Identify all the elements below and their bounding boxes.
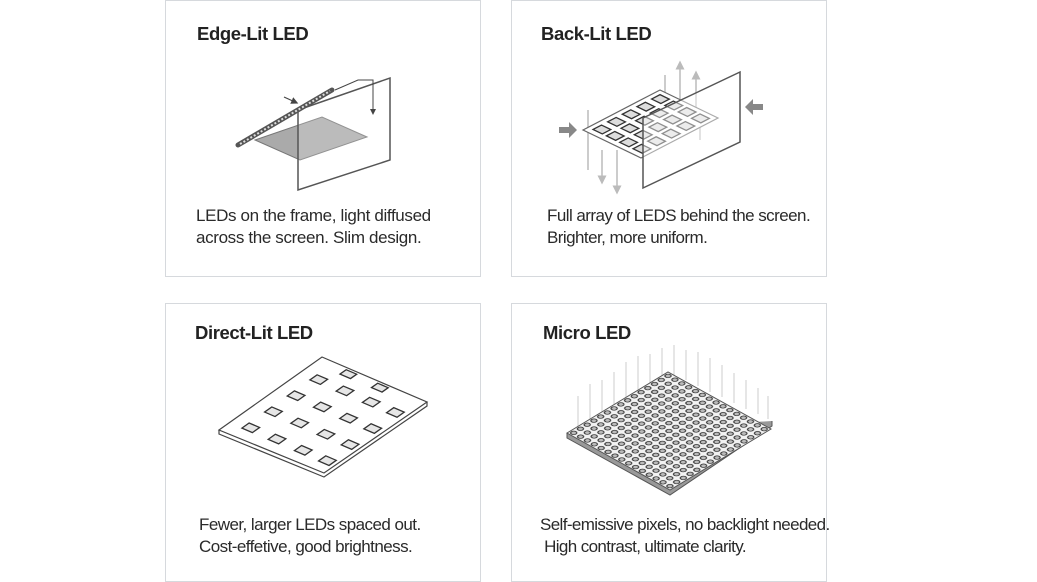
illustration: micro: [567, 345, 772, 495]
text: micro: Self-emissive pixels, no backlight needed.: [540, 515, 830, 534]
text: back-lit: Brighter, more uniform.: [547, 228, 707, 247]
panel: back-lit: [511, 0, 827, 277]
text: direct-lit: Fewer, larger LEDs spaced out.: [199, 515, 421, 534]
illustration: edge-lit: [238, 78, 390, 190]
text: back-lit: Full array of LEDS behind the screen.: [547, 206, 810, 225]
title: direct-lit: Direct-Lit LED: [195, 322, 313, 343]
panel: micro: [511, 303, 827, 582]
text: edge-lit: LEDs on the frame, light diffused: [196, 206, 431, 225]
illustration: direct-lit: [219, 357, 427, 477]
text: micro: High contrast, ultimate clarity.: [544, 537, 746, 556]
text: micro: [540, 515, 830, 556]
text: edge-lit: across the screen. Slim design.: [196, 228, 421, 247]
title: micro: Micro LED: [543, 322, 631, 343]
panel: direct-lit: [165, 303, 481, 582]
text: edge-lit: [196, 206, 431, 247]
panel: edge-lit: [165, 0, 481, 277]
text: back-lit: [547, 206, 810, 247]
title: back-lit: Back-Lit LED: [541, 23, 651, 44]
text: direct-lit: [199, 515, 421, 556]
title: edge-lit: Edge-Lit LED: [197, 23, 308, 44]
text: direct-lit: Cost-effetive, good brightness.: [199, 537, 412, 556]
illustration: back-lit: [559, 65, 763, 190]
